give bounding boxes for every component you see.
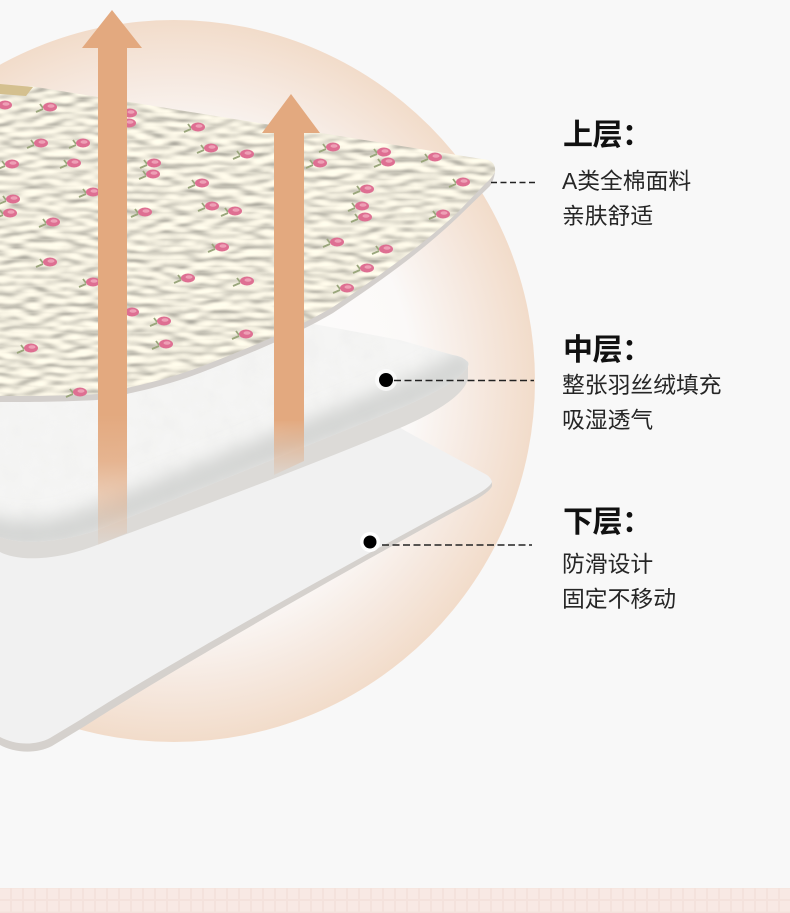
text: bottom layer description: 防滑设计: [562, 551, 653, 577]
top layer: cotton quilt: [0, 70, 510, 410]
heading: middle layer: 中层：: [563, 334, 652, 367]
bottom layer: anti-slip sheet: [0, 428, 492, 752]
background glow circle: [0, 20, 535, 742]
pointer: middle layer: [375, 369, 534, 391]
bottom grid band: [0, 888, 790, 913]
layered mattress pad illustration: [0, 10, 535, 752]
foam top surface: [0, 324, 468, 523]
text: middle layer description: [562, 372, 722, 432]
foam side: [0, 322, 468, 558]
arrow: right upward: [262, 94, 320, 475]
text: middle layer description: 整张羽丝绒填充: [562, 372, 722, 398]
heading: top layer: 上层：: [563, 119, 652, 152]
rose print: [0, 100, 470, 397]
middle layer: down filling: [0, 324, 468, 558]
heading: bottom layer: 下层：: [563, 506, 652, 539]
pointer: bottom layer: [360, 532, 532, 552]
text: middle layer description: 吸湿透气: [562, 406, 653, 432]
text: top layer description: [562, 168, 691, 228]
pointer: top layer: [491, 182, 537, 184]
foam shading: [0, 358, 472, 536]
folded corner: [0, 84, 33, 96]
arrow: left upward: [82, 10, 142, 545]
text: top layer description: 亲肤舒适: [562, 202, 653, 228]
quilt surface: [0, 86, 496, 396]
text: bottom layer description: 固定不移动: [562, 586, 676, 612]
text: bottom layer description: [562, 551, 676, 612]
text: top layer description: A类全棉面料: [562, 168, 691, 194]
quilt edge: [0, 172, 495, 402]
